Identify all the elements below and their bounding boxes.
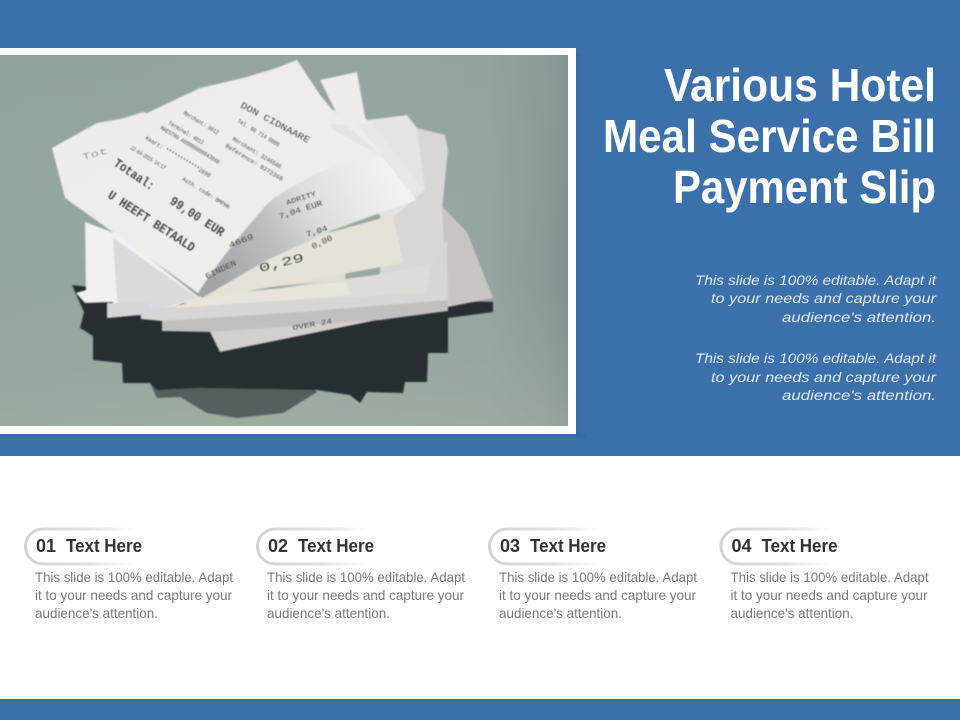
- heading 02: 02: [268, 536, 288, 556]
- body 01: it to your needs and capture your: [35, 587, 232, 603]
- receipt printed text: 7,04 EUR: [278, 199, 324, 222]
- left sheets: [76, 222, 200, 318]
- body 04: it to your needs and capture your: [730, 587, 928, 603]
- receipt printed text: Terminal: 4012: [167, 120, 205, 146]
- heading 01: 01: [36, 536, 56, 556]
- photo frame with receipts: [0, 48, 589, 438]
- description text 2: [695, 350, 938, 403]
- receipt stack: [52, 60, 493, 352]
- body 02: it to your needs and capture your: [267, 587, 464, 603]
- title: Various Hotel: [664, 59, 936, 111]
- curled underside: [198, 157, 416, 298]
- body 01: This slide is 100% editable. Adapt: [35, 569, 233, 585]
- item 01: [26, 529, 233, 621]
- receipt printed text: Tot: [81, 147, 109, 163]
- body 01: audience's attention.: [35, 605, 158, 621]
- main receipt: [52, 62, 383, 293]
- receipt printed text: Tel. 06 714 0000: [236, 118, 281, 149]
- description text 2: This slide is 100% editable. Adapt it: [695, 350, 937, 366]
- receipt printed text: ADRITY: [285, 190, 318, 208]
- description text 2: to your needs and capture your: [711, 369, 938, 385]
- description text 1: [695, 272, 938, 325]
- item 03: [490, 529, 697, 621]
- receipt printed text: 4669: [228, 233, 255, 251]
- description text 1: to your needs and capture your: [711, 290, 938, 306]
- description text 1: audience's attention.: [782, 309, 936, 325]
- body 04: [730, 569, 929, 621]
- bottom bar: [0, 699, 960, 720]
- back sheets: [442, 206, 494, 308]
- receipt printed text: Reference: 0272360: [224, 143, 284, 183]
- item 02: [258, 529, 465, 621]
- body 03: it to your needs and capture your: [499, 587, 696, 603]
- receipt printed text: [81, 101, 334, 333]
- receipt printed text: Merchant: 3246586: [231, 136, 283, 171]
- body 02: [267, 569, 465, 621]
- description text 1: This slide is 100% editable. Adapt it: [695, 272, 937, 288]
- body 02: audience's attention.: [267, 605, 390, 621]
- body 01: [35, 569, 233, 621]
- receipt printed text: Kaart: ************2090: [144, 135, 212, 180]
- white flap right: [358, 120, 423, 197]
- receipt printed text: 7,04: [305, 224, 329, 240]
- description text 2: audience's attention.: [782, 387, 936, 403]
- body 03: [499, 569, 697, 621]
- body 04: This slide is 100% editable. Adapt: [730, 569, 929, 585]
- title: [603, 59, 936, 213]
- pill label 03: [490, 529, 600, 564]
- title: Payment Slip: [673, 161, 936, 213]
- title: Meal Service Bill: [603, 110, 936, 162]
- cream sheet: [200, 215, 403, 300]
- body 03: audience's attention.: [499, 605, 622, 621]
- lower sheets: [210, 320, 377, 352]
- heading 04: 04: [732, 536, 752, 556]
- pill label 04: [721, 529, 832, 564]
- receipt printed text: MAESTRO A00000000043060: [159, 125, 221, 166]
- header panel: [0, 0, 960, 456]
- receipt printed text: DON CIDNAARE: [239, 101, 311, 146]
- body 02: This slide is 100% editable. Adapt: [267, 569, 465, 585]
- receipt printed text: 0,29: [258, 251, 306, 276]
- receipt printed text: Merchant: 6012: [182, 110, 220, 136]
- heading 03: 03: [500, 536, 520, 556]
- receipt printed text: Totaal:: [111, 156, 157, 194]
- body 04: audience's attention.: [730, 605, 854, 621]
- receipt printed text: 22-04-2015 14:17: [129, 145, 167, 171]
- receipt printed text: 99,00 EUR: [167, 194, 227, 240]
- pill label 01: [26, 529, 136, 564]
- receipt printed text: Auth. code: BMPHK: [181, 176, 232, 211]
- receipt printed text: 0,00: [310, 234, 334, 252]
- item 03: Text Here: [530, 536, 606, 556]
- item 04: Text Here: [762, 536, 838, 556]
- body 03: This slide is 100% editable. Adapt: [499, 569, 697, 585]
- item 02: Text Here: [298, 536, 374, 556]
- item 04: [721, 529, 929, 621]
- pill label 02: [258, 529, 368, 564]
- receipt printed text: U HEEFT BETAALD: [105, 188, 198, 255]
- receipt printed text: EINDEN: [204, 259, 238, 282]
- item 01: Text Here: [66, 536, 142, 556]
- receipt printed text: OVER 24: [292, 318, 333, 333]
- receipt shadow: [72, 285, 493, 418]
